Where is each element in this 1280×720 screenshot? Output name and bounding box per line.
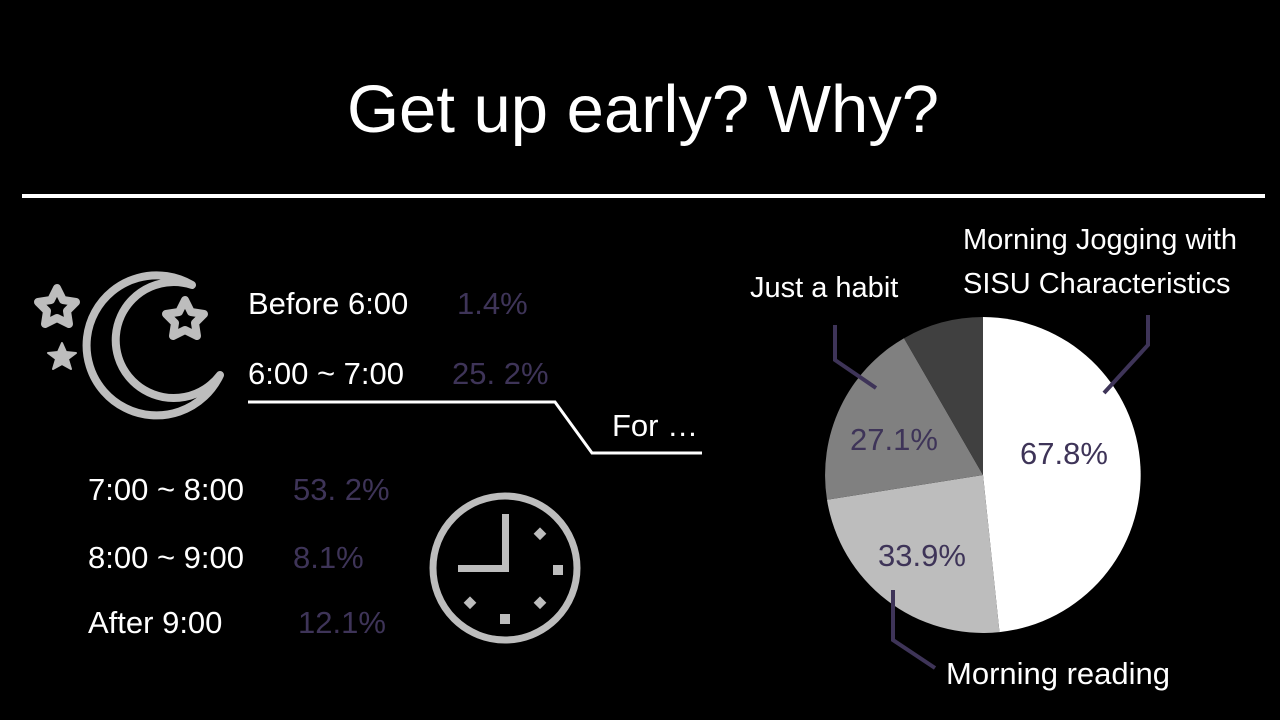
text: 53. 2%	[293, 472, 390, 507]
times list: Before 6:00	[248, 286, 408, 321]
text: 8:00 ~ 9:00	[88, 540, 244, 575]
title: Get up early? Why?	[347, 72, 939, 147]
text: 12.1%	[298, 605, 386, 640]
text: 6:00 ~ 7:00	[248, 356, 404, 391]
text: After 9:00	[88, 605, 222, 640]
text: For …	[612, 408, 698, 443]
text: 33.9%	[878, 538, 966, 573]
pie labels: 67.8%	[1020, 436, 1108, 471]
line connector	[248, 402, 702, 453]
text: Morning Jogging with	[963, 224, 1237, 256]
leader lines	[835, 315, 1148, 668]
text: 1.4%	[457, 286, 528, 321]
text: 25. 2%	[452, 356, 549, 391]
icon: clock	[433, 496, 577, 640]
text: Morning reading	[946, 656, 1170, 691]
text: 8.1%	[293, 540, 364, 575]
icon: moon and stars	[38, 275, 220, 415]
text: 7:00 ~ 8:00	[88, 472, 244, 507]
text: 27.1%	[850, 422, 938, 457]
text: SISU Characteristics	[963, 268, 1231, 300]
text: Just a habit	[750, 272, 898, 304]
pie chart	[825, 317, 1141, 633]
